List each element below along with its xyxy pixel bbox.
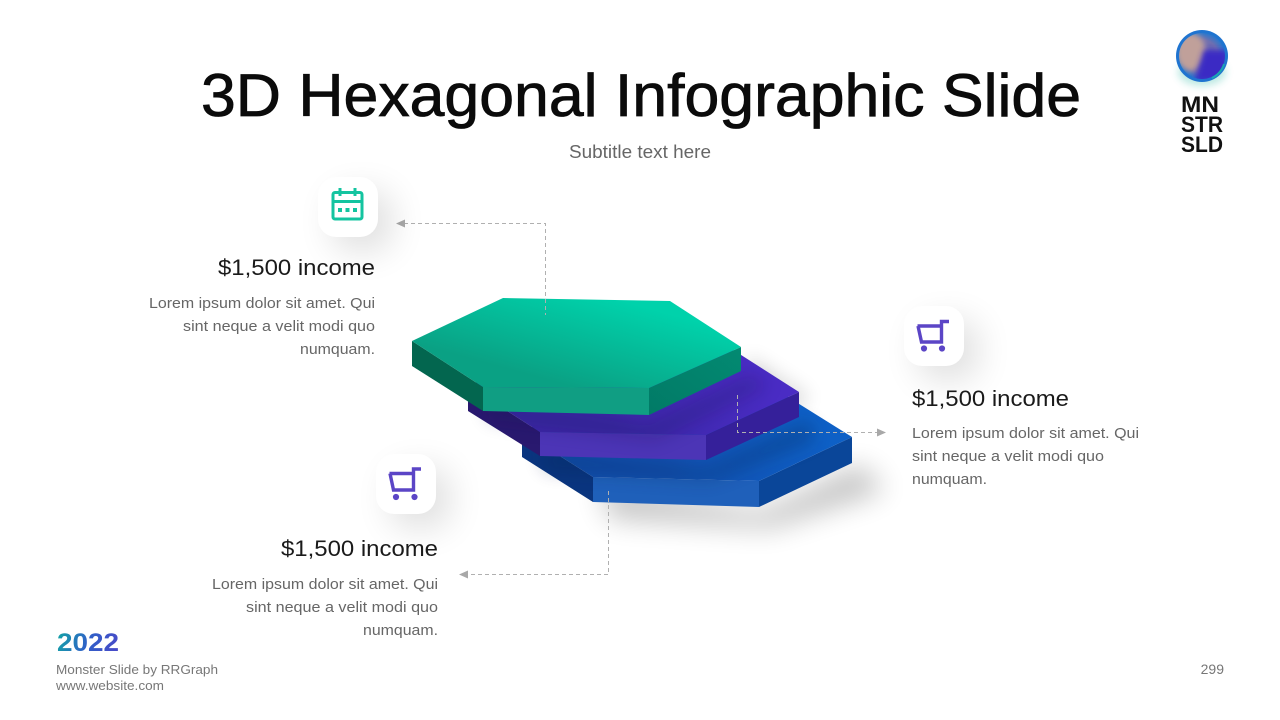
footer credits: Monster Slide by RRGraph <box>56 662 218 677</box>
body text: numquam. <box>300 341 375 358</box>
logo wordmark: STR <box>1181 112 1223 137</box>
footer year: 2022 <box>57 629 119 657</box>
heading: $1,500 income <box>218 255 375 280</box>
body text <box>212 576 438 639</box>
logo sphere <box>1176 30 1228 86</box>
callout: top left <box>149 177 392 358</box>
layer: purple hexagon <box>468 343 799 460</box>
body text: Lorem ipsum dolor sit amet. Qui <box>912 425 1139 442</box>
icon: calendar <box>318 177 392 251</box>
logo <box>1176 30 1228 157</box>
connector: right <box>738 395 886 436</box>
layer: blue hexagon <box>522 389 852 507</box>
body text: sint neque a velit modi quo <box>183 318 375 335</box>
icon: shopping cart <box>376 454 450 528</box>
connector: top left <box>396 220 546 315</box>
body text: Lorem ipsum dolor sit amet. Qui <box>212 576 438 593</box>
footer credits: www.website.com <box>55 678 164 693</box>
body text <box>149 295 375 358</box>
callout: bottom left <box>212 454 450 639</box>
connector: bottom <box>459 491 608 578</box>
logo wordmark: MN <box>1181 92 1219 117</box>
footer credits <box>55 662 218 693</box>
stack shadow <box>600 465 885 528</box>
green layer shadow <box>483 375 770 440</box>
3D hexagon stack <box>412 298 885 528</box>
icon: shopping cart <box>904 306 978 380</box>
body text: sint neque a velit modi quo <box>912 448 1104 465</box>
heading: $1,500 income <box>281 536 438 561</box>
callout: right <box>904 306 1139 488</box>
body text <box>912 425 1139 488</box>
logo wordmark: SLD <box>1181 132 1223 157</box>
body text: sint neque a velit modi quo <box>246 599 438 616</box>
layer: green hexagon <box>412 298 741 415</box>
body text: numquam. <box>363 622 438 639</box>
logo wordmark <box>1181 92 1223 157</box>
title: 3D Hexagonal Infographic Slide <box>201 62 1081 129</box>
heading: $1,500 income <box>912 386 1069 411</box>
body text: numquam. <box>912 471 987 488</box>
body text: Lorem ipsum dolor sit amet. Qui <box>149 295 375 312</box>
subtitle: Subtitle text here <box>569 142 711 162</box>
upper layers soft shadow <box>740 355 810 420</box>
purple layer shadow <box>540 420 815 480</box>
page number: 299 <box>1201 661 1224 677</box>
